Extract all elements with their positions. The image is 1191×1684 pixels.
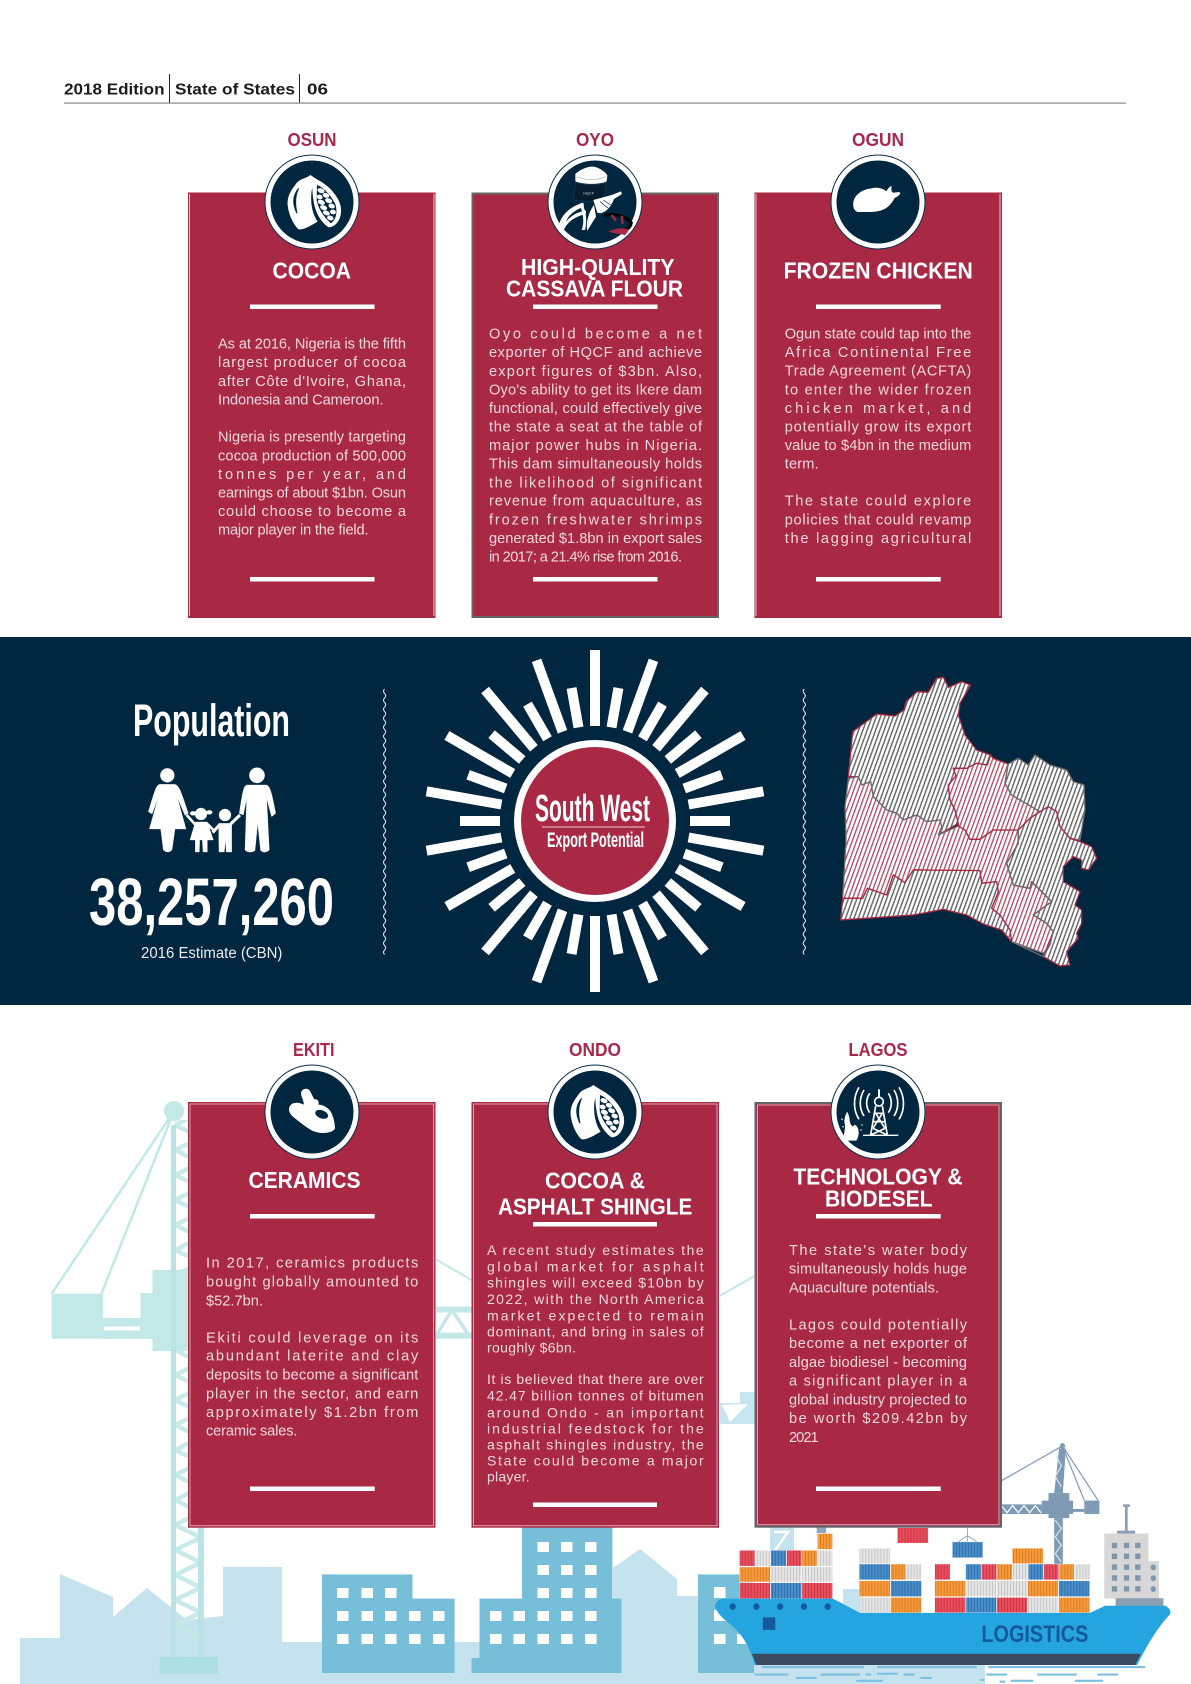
body text: Ogun	[785, 326, 971, 547]
background illustration: cargo ship with containers and port crane	[715, 1443, 1170, 1682]
port crane	[817, 1443, 1099, 1564]
body text: Osun: largest producer of cocoa	[218, 355, 407, 371]
body text: Ondo: around Ondo - an important	[487, 1404, 704, 1420]
heading: High-quality cassava flour: HIGH-QUALITY	[521, 254, 675, 280]
water ripples	[755, 1667, 1145, 1682]
heading: Population: Population	[133, 695, 290, 746]
body text: Ekiti: Ekiti could leverage on its	[206, 1330, 418, 1346]
panel: Ogun frozen chicken	[754, 130, 1002, 618]
ship hull	[715, 1599, 1170, 1665]
emblem subtitle: Export Potential	[547, 829, 644, 852]
icon: family	[148, 768, 276, 852]
background illustration: tower crane left	[52, 1101, 794, 1674]
body text: Lagos: algae biodiesel - becoming	[789, 1355, 967, 1371]
wavy divider right	[803, 689, 805, 954]
body text: Osun: cocoa production of 500,000	[218, 448, 406, 464]
body text: Oyo: generated $1.8bn in export sales	[489, 531, 702, 547]
body text: Lagos: become a net exporter of	[789, 1336, 968, 1352]
body text: Oyo: the state a seat at the table of	[489, 420, 703, 436]
body text: Oyo: revenue from aquaculture, as	[489, 494, 702, 510]
body text: Lagos: be worth $209.42bn by	[789, 1411, 968, 1427]
state label: Oyo: OYO	[576, 130, 614, 150]
body text: Osun: Indonesia and Cameroon.	[218, 392, 384, 408]
page header: 2018 Edition	[64, 81, 164, 98]
body text: Ogun: the lagging agricultural	[785, 531, 971, 547]
body text: Ondo: player.	[487, 1468, 530, 1484]
body text: Ekiti: abundant laterite and clay	[206, 1348, 419, 1364]
icon: cassava flour, rice and shrimp: HQCF	[583, 192, 595, 196]
body text: Ogun: potentially grow its export	[785, 420, 971, 436]
icon: telecom tower and algae	[831, 1065, 925, 1159]
heading: Technology and biodiesel: TECHNOLOGY &	[793, 1164, 963, 1190]
icon: ceramics	[265, 1065, 359, 1159]
body text: Ekiti: ceramic sales.	[206, 1424, 297, 1440]
body text: Osun: tonnes per year, and	[218, 467, 406, 483]
body text: Ekiti: approximately $1.2bn from	[206, 1405, 418, 1421]
page header: State of States	[175, 81, 295, 98]
body text: Oyo: export figures of $3bn. Also,	[489, 364, 702, 380]
sunburst emblem	[426, 650, 764, 992]
panel: Ekiti ceramics	[188, 1040, 436, 1528]
body text: Ekiti: $52.7bn.	[206, 1294, 263, 1310]
heading: Cocoa and asphalt shingle: ASPHALT SHINGLE	[498, 1194, 692, 1220]
body text: Lagos: Lagos could potentially	[789, 1318, 968, 1334]
heading: Ceramics: CERAMICS	[248, 1167, 360, 1193]
body text: Ondo: market expected to remain	[487, 1308, 704, 1324]
background illustration: city skyline	[20, 1520, 985, 1684]
panel: Ondo cocoa and asphalt shingle	[472, 1040, 719, 1528]
icon: cassava flour, rice and shrimp	[548, 155, 642, 249]
body text: Lagos: Aquaculture potentials.	[789, 1280, 939, 1296]
body text: Ondo: dominant, and bring in sales of	[487, 1324, 704, 1340]
wavy divider left	[384, 689, 386, 954]
page header: 06	[307, 81, 328, 98]
body text: Osun: earnings of about $1bn. Osun	[218, 486, 406, 502]
emblem title: South West	[535, 788, 650, 830]
icon: cocoa pod	[548, 1065, 642, 1159]
body text: Oyo: the likelihood of significant	[489, 476, 702, 492]
state label: Ogun: OGUN	[852, 130, 904, 150]
body text: Ondo: A recent study estimates the	[487, 1242, 704, 1258]
state label: Ekiti: EKITI	[293, 1040, 334, 1060]
heading: Cocoa: COCOA	[272, 258, 351, 284]
body text: Ondo: global market for asphalt	[487, 1258, 704, 1274]
body text: Ogun: Ogun state could tap into the	[785, 326, 971, 342]
body text: Osun	[218, 336, 407, 538]
map: South West states	[841, 677, 1097, 966]
body text: Oyo: This dam simultaneously holds	[489, 456, 702, 472]
state label: Osun: OSUN	[288, 130, 336, 150]
panel: Lagos technology and biodiesel	[756, 1040, 1001, 1527]
body text: Ogun: The state could explore	[785, 494, 971, 510]
body text: Ogun: chicken market, and	[785, 401, 971, 417]
body text: Osun: As at 2016, Nigeria is the fifth	[218, 336, 406, 352]
body text: Ondo: industrial feedstock for the	[487, 1420, 704, 1436]
body text: Oyo	[489, 326, 703, 566]
body text: Ekiti	[206, 1256, 419, 1440]
body text: Ogun: value to $4bn in the medium	[785, 438, 971, 454]
body text: Ekiti: In 2017, ceramics products	[206, 1256, 418, 1272]
panel: Oyo cassava flour	[472, 130, 718, 617]
body text: Oyo: exporter of HQCF and achieve	[489, 345, 702, 361]
population figure: 38,257,260	[89, 865, 334, 940]
population source: 2016 Estimate (CBN)	[141, 945, 282, 962]
body text: Osun: Nigeria is presently targeting	[218, 430, 406, 446]
body text: Ondo: It is believed that there are over	[487, 1371, 704, 1387]
body text: Lagos: simultaneously holds huge	[789, 1262, 967, 1278]
body text: Ogun: policies that could revamp	[785, 512, 971, 528]
heading: Cocoa and asphalt shingle	[498, 1168, 692, 1220]
containers	[739, 1528, 1090, 1613]
heading: High-quality cassava flour: CASSAVA FLOUR	[506, 276, 683, 302]
body text: Oyo: functional, could effectively give	[489, 401, 702, 417]
body text: Ondo: State could become a major	[487, 1452, 704, 1468]
body text: Lagos: global industry projected to	[789, 1392, 967, 1408]
body text: Oyo: in 2017; a 21.4% rise from 2016.	[489, 550, 682, 566]
body text: Ondo: 2022, with the North America	[487, 1291, 704, 1307]
icon: chicken	[831, 155, 925, 249]
heading: Technology and biodiesel	[793, 1164, 963, 1212]
body text: Ogun: Africa Continental Free	[785, 345, 971, 361]
body text: Oyo: Oyo could become a net	[489, 326, 702, 342]
body text: Lagos: 2021	[789, 1430, 819, 1446]
heading: Cocoa and asphalt shingle: COCOA &	[545, 1168, 645, 1194]
body text: Oyo: Oyo's ability to get its Ikere dam	[489, 382, 702, 398]
body text: Oyo: frozen freshwater shrimps	[489, 512, 702, 528]
body text: Lagos: a significant player in a	[789, 1374, 968, 1390]
body text: Ekiti: player in the sector, and earn	[206, 1386, 418, 1402]
body text: Ogun: to enter the wider frozen	[785, 382, 971, 398]
body text: Osun: could choose to become a	[218, 504, 407, 520]
heading: Frozen chicken: FROZEN CHICKEN	[784, 258, 973, 284]
body text: Ekiti: deposits to become a significant	[206, 1368, 418, 1384]
ship bridge tower	[1104, 1504, 1163, 1607]
body text: Lagos	[789, 1243, 968, 1446]
body text: Lagos: The state's water body	[789, 1243, 968, 1259]
heading: High-quality cassava flour	[506, 254, 683, 302]
page header	[64, 74, 1126, 104]
ship label: LOGISTICS: LOGISTICS	[981, 1621, 1088, 1648]
body text: Ekiti: bought globally amounted to	[206, 1274, 418, 1290]
icon: cocoa pod	[265, 155, 359, 249]
body text: Ondo: roughly $6bn.	[487, 1340, 576, 1356]
state label: Ondo: ONDO	[569, 1040, 621, 1060]
body text: Ondo	[487, 1242, 704, 1484]
body text: Osun: after Côte d'Ivoire, Ghana,	[218, 374, 406, 390]
body text: Ondo: shingles will exceed $10bn by	[487, 1274, 704, 1290]
central band: population and South West export potential	[0, 637, 1191, 1005]
body text: Ondo: asphalt shingles industry, the	[487, 1436, 704, 1452]
panel: Osun cocoa	[188, 130, 436, 618]
heading: Technology and biodiesel: BIODESEL	[825, 1186, 932, 1212]
body text: Ondo: 42.47 billion tonnes of bitumen	[487, 1388, 704, 1404]
body text: Oyo: major power hubs in Nigeria.	[489, 438, 702, 454]
body text: Ogun: Trade Agreement (ACFTA)	[785, 364, 971, 380]
state label: Lagos: LAGOS	[848, 1040, 908, 1060]
body text: Ogun: term.	[785, 456, 819, 472]
body text: Osun: major player in the field.	[218, 522, 368, 538]
